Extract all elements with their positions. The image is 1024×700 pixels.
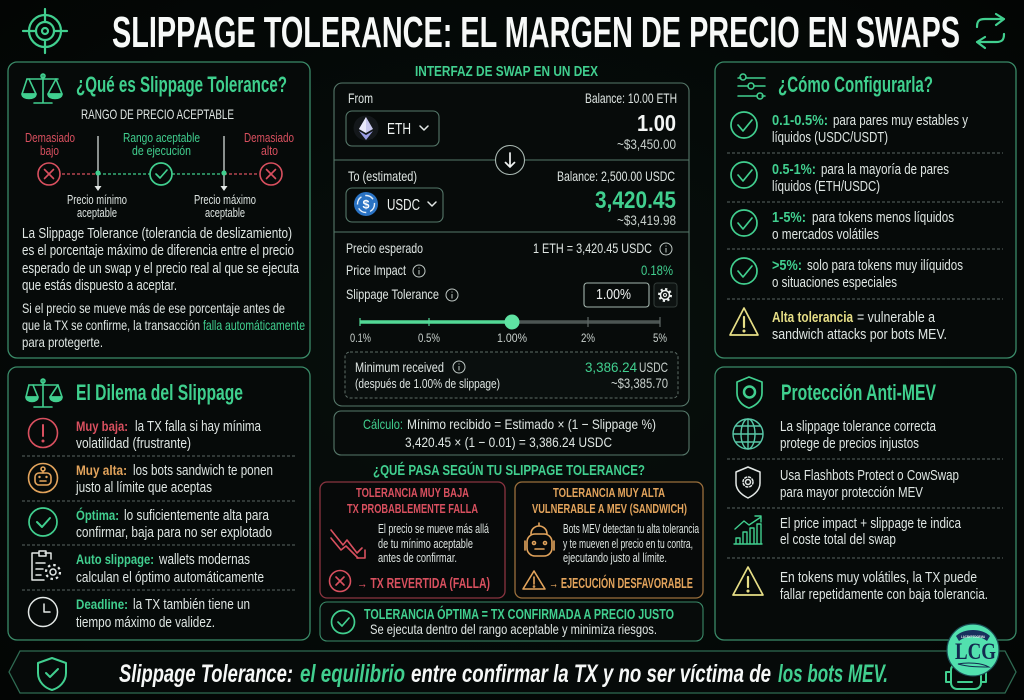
icon: target (23, 9, 67, 53)
panel: tolerancia muy alta: Bots MEV detectan tu alta tolerancia (563, 521, 699, 536)
price range diagram (25, 130, 294, 220)
definition text: que la TX se confirme, la transacción (22, 317, 200, 333)
panel: tolerancia muy alta: → EJECUCIÓN DESFAVORABLE (549, 574, 693, 592)
logo: LCG: LCG (955, 639, 996, 664)
subheading: RANGO DE PRECIO ACEPTABLE (81, 106, 234, 122)
row: óptima: lo suficientemente alta para (124, 508, 270, 524)
heading: qué pasa según tu slippage tolerance: ¿QUÉ PASA SEGÚN TU SLIPPAGE TOLERANCE? (373, 461, 645, 479)
icon: usdc: $ (362, 198, 370, 212)
icon: falling chart (331, 530, 365, 558)
row: flashbots (736, 467, 959, 501)
row: 1-5%: o mercados volátiles (772, 227, 879, 243)
panel: tolerancia muy alta (515, 482, 703, 598)
row: auto slippage: Auto slippage: (76, 551, 154, 567)
panel: tolerancia muy baja: → TX REVERTIDA (FALLA) (357, 576, 490, 592)
definition text: Si el precio se mueve más de ese porcentaje antes de (22, 300, 285, 316)
slider: 0.5% (418, 331, 440, 345)
panel: tolerancia muy baja: TOLERANCIA MUY BAJA (356, 485, 469, 500)
banner text: el equilibrio (300, 660, 405, 688)
row: muy baja: Muy baja: (76, 418, 128, 434)
row: price impact: el coste total del swap (780, 532, 896, 548)
heading: ¿Cómo Configurarla? (778, 72, 933, 97)
icon: usdc (354, 192, 378, 216)
heading: El Dilema del Slippage (76, 380, 243, 405)
from section: ~$3,450.00 (617, 136, 676, 152)
row: price impact: El price impact + slippage te indica (780, 516, 962, 532)
from section (346, 90, 677, 152)
row: 0.5-1%: para la mayoría de pares (821, 162, 949, 178)
minimum received box: USDC (639, 359, 668, 375)
row: 0.1-0.5% (731, 112, 969, 146)
row: muy alta: justo al límite que aceptas (75, 480, 212, 496)
icon: ethereum (354, 116, 378, 140)
row: globe (733, 419, 937, 452)
panel: tolerancia óptima: TOLERANCIA ÓPTIMA = TX CONFIRMADA A PRECIO JUSTO (364, 605, 674, 623)
price details: Price Impact (346, 262, 406, 278)
icon: shield (737, 377, 762, 408)
row: globe: La slippage tolerance correcta (780, 419, 937, 435)
icon: swap arrows (977, 14, 1004, 48)
row: muy baja: volatilidad (frustrante) (76, 436, 191, 452)
to section (346, 168, 676, 228)
banner text: entre confirmar la TX y no ser víctima de (411, 660, 771, 688)
to section: Balance: 2,500.00 USDC (557, 168, 675, 184)
price range diagram: Demasiado (244, 130, 294, 145)
banner text (119, 660, 888, 688)
definition text: para protegerte. (22, 334, 103, 350)
banner text: los bots MEV. (778, 660, 888, 688)
row: deadline: tiempo máximo de validez. (76, 615, 215, 631)
row: más de 5%: o situaciones especiales (772, 275, 897, 291)
slider: 1.00% (497, 331, 527, 345)
panel: protección anti-mev (715, 367, 1016, 640)
row: óptima (29, 506, 272, 541)
row: 0.1-0.5%: para pares muy estables y (833, 113, 969, 129)
slider: 5% (653, 331, 667, 345)
row: auto slippage: wallets modernas (158, 552, 250, 568)
minimum received box: (después de 1.00% de slippage) (355, 376, 500, 391)
calculation box (334, 411, 689, 455)
panel: cómo configurarla (715, 62, 1016, 358)
row: 0.5-1%: líquidos (ETH/USDC) (772, 179, 880, 195)
definition text: es el porcentaje máximo de diferencia entre el precio (22, 243, 294, 259)
minimum received box: 3,386.24 (585, 359, 637, 375)
row: alta tolerancia: Alta tolerancia (772, 310, 854, 326)
price range diagram: aceptable (77, 206, 117, 220)
row: muy alta (28, 462, 273, 496)
row: alta tolerancia: = vulnerable a (857, 310, 936, 326)
row: óptima: Óptima: (76, 506, 119, 523)
panel: tolerancia óptima: Se ejecuta dentro del rango aceptable y minimiza riesgos. (370, 621, 657, 637)
row: alta tolerancia: sandwich attacks por bots MEV. (772, 327, 947, 343)
price details: 1 ETH = 3,420.45 USDC (533, 240, 652, 256)
icon: scales (26, 379, 62, 407)
to section: ~$3,419.98 (617, 212, 676, 228)
panel: swap interface (334, 83, 689, 406)
price details: Precio esperado (346, 240, 423, 256)
icon: arrow down (496, 146, 524, 174)
panel: tolerancia muy alta: TOLERANCIA MUY ALTA (553, 485, 665, 500)
price range diagram: Precio mínimo (67, 193, 127, 207)
row: deadline (28, 596, 250, 631)
calculation box: Cálculo: (363, 416, 403, 432)
row: 0.1-0.5%: líquidos (USDC/USDT) (772, 130, 888, 146)
to section: 3,420.45 (595, 187, 676, 214)
row: muy alta: los bots sandwich te ponen (133, 463, 273, 479)
row: alta tolerancia (730, 308, 947, 343)
to section: To (estimated) (348, 168, 417, 184)
logo: LCG: LACRYPTOGEMA (961, 634, 985, 639)
row: muy alta: Muy alta: (76, 462, 127, 478)
panel: tolerancia muy alta: ejecutando justo al límite. (563, 550, 667, 565)
heading: ¿Qué es Slippage Tolerance? (76, 72, 287, 97)
icon: gear (659, 289, 671, 301)
row: auto slippage: calculan el óptimo automáticamente (76, 570, 264, 586)
banner text: Slippage Tolerance: (119, 660, 293, 688)
price range diagram: Rango aceptable (123, 130, 200, 145)
row: auto slippage (32, 551, 264, 586)
icon: warning (523, 571, 545, 589)
row: óptima: confirmar, baja para no ser explotado (76, 525, 272, 541)
panel: tolerancia muy alta: VULNERABLE A MEV (SANDWICH) (532, 501, 687, 516)
bottom banner (9, 651, 1016, 693)
definition text (22, 226, 305, 350)
panel: tolerancia óptima (320, 602, 703, 641)
logo: LCG (947, 624, 999, 676)
definition text: que estás dispuesto a aceptar. (22, 278, 177, 294)
row: deadline: la TX también tiene un (133, 597, 250, 613)
icon: sliders (738, 74, 765, 99)
price range diagram: de ejecución (132, 143, 191, 158)
row: 0.5-1%: 0.5-1%: (772, 162, 816, 178)
row: tokens volátiles (733, 567, 988, 603)
heading: Protección Anti-MEV (781, 380, 936, 405)
price range diagram: Demasiado (25, 130, 75, 145)
price range diagram: bajo (40, 143, 59, 158)
row: 1-5%: para tokens menos líquidos (812, 210, 954, 226)
price details (346, 240, 677, 307)
row: flashbots: para mayor protección MEV (780, 485, 923, 501)
panel: qué es slippage tolerance (8, 62, 310, 358)
row: flashbots: Usa Flashbots Protect o CowSwap (780, 468, 959, 484)
icon: shield check (38, 658, 66, 690)
row: deadline: Deadline: (76, 596, 128, 612)
price details: 1.00% (596, 287, 631, 303)
row: más de 5% (731, 258, 963, 291)
row: 0.1-0.5%: 0.1-0.5%: (772, 113, 828, 129)
panel: tolerancia muy baja: El precio se mueve más allá (378, 521, 490, 536)
minimum received box (345, 352, 678, 398)
icon: x circle (330, 570, 350, 592)
price range diagram: alto (261, 143, 278, 158)
panel: tolerancia muy baja (320, 482, 505, 598)
icon: check (332, 610, 354, 634)
row: 0.5-1% (731, 162, 949, 195)
to section: USDC (387, 197, 420, 214)
definition text: esperado de un swap y el precio real al que se ejecuta (22, 261, 300, 277)
definition text: falla automáticamente (203, 317, 305, 333)
definition text: La Slippage Tolerance (tolerancia de deslizamiento) (22, 226, 292, 242)
row: muy baja (28, 418, 262, 452)
row: más de 5%: >5%: (772, 258, 802, 274)
calculation box: Mínimo recibido = Estimado × (1 − Slippage %) (407, 416, 656, 432)
panel: el dilema del slippage (8, 367, 310, 640)
row: tokens volátiles: En tokens muy volátiles, la TX puede (780, 570, 977, 586)
row: muy baja: la TX falla si hay mínima (135, 419, 262, 435)
heading: interfaz de swap: INTERFAZ DE SWAP EN UN DEX (415, 64, 598, 80)
minimum received box: ~$3,385.70 (611, 375, 668, 391)
slider (350, 314, 667, 345)
panel: tolerancia muy alta: y te mueven el precio en tu contra, (563, 536, 693, 551)
from section: ETH (387, 121, 411, 138)
price details: 0.18% (641, 262, 673, 278)
panel: tolerancia muy baja: TX PROBABLEMENTE FALLA (347, 501, 478, 516)
panel: tolerancia muy baja: de tu mínimo aceptable (378, 536, 473, 551)
from section: From (348, 90, 373, 106)
icon: robot (525, 523, 554, 556)
slider: 0.1% (350, 331, 371, 345)
from section: Balance: 10.00 ETH (585, 90, 677, 106)
price details: Slippage Tolerance (346, 286, 439, 302)
minimum received box: Minimum received (355, 359, 444, 375)
row: 1-5% (731, 210, 954, 243)
icon: robot (946, 664, 986, 689)
row: price impact (734, 516, 962, 548)
price range diagram: Precio máximo (194, 193, 256, 207)
slider: 2% (581, 331, 595, 345)
panel: tolerancia muy baja: antes de confirmar. (378, 550, 457, 565)
calculation box: 3,420.45 × (1 − 0.01) = 3,386.24 USDC (405, 434, 612, 450)
row: más de 5%: solo para tokens muy ilíquidos (807, 258, 963, 274)
price range diagram: aceptable (205, 206, 245, 220)
from section: 1.00 (637, 110, 676, 136)
row: globe: protege de precios injustos (780, 436, 919, 452)
icon: scales (22, 74, 62, 103)
row: 1-5%: 1-5%: (772, 210, 806, 226)
